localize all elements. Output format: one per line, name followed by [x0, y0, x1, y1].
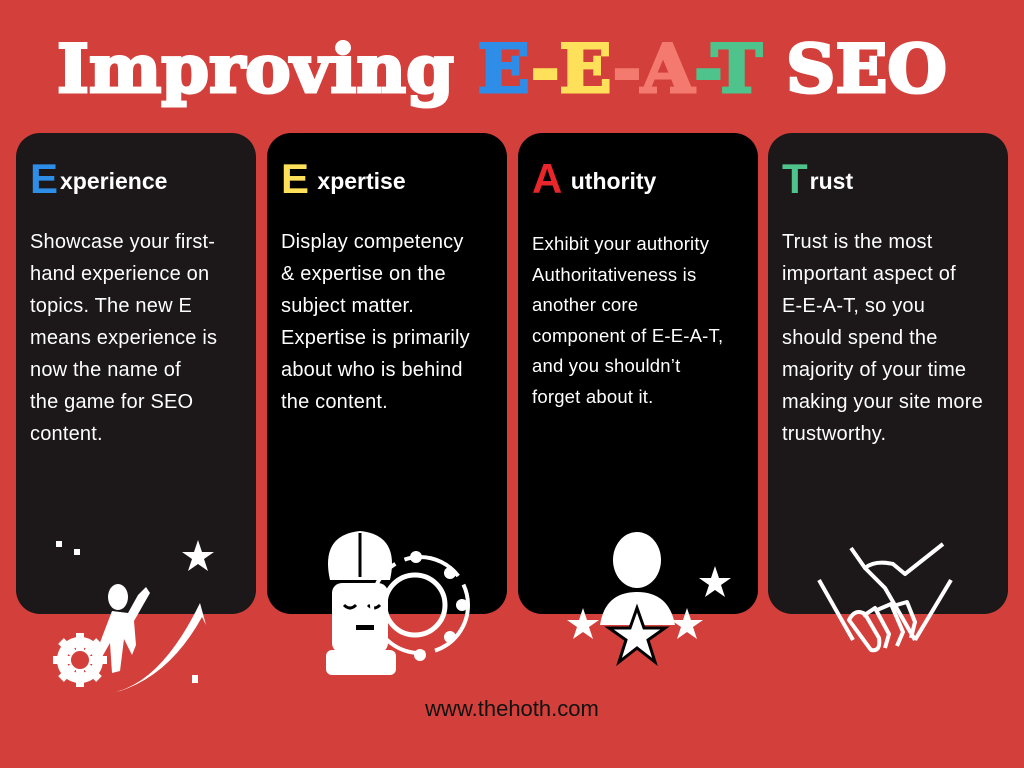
text: authority: and you shouldn’t [532, 355, 680, 376]
text: experience: now the name of [30, 359, 181, 381]
text: authority: Authoritativeness is [532, 264, 696, 284]
text: trust: trustworthy. [782, 423, 886, 445]
title: Improving E-E-A-T SEO [57, 30, 947, 108]
heading: trust: Trust [782, 155, 853, 202]
text: authority: forget about it. [532, 386, 653, 406]
panel: expertise [267, 133, 507, 614]
icon: climber [53, 540, 214, 692]
panel: authority [518, 133, 758, 614]
text: experience: Showcase your first- [30, 231, 215, 253]
heading: experience: Experience [30, 155, 167, 202]
heading: expertise: E xpertise [281, 155, 406, 202]
text: trust: Trust is the most [782, 231, 932, 253]
text: experience: the game for SEO [30, 391, 193, 413]
text: expertise: Display competency [281, 231, 464, 253]
text: trust: majority of your time [782, 359, 966, 381]
panel: experience [16, 133, 256, 614]
text: expertise: the content. [281, 391, 388, 413]
text: experience: hand experience on [30, 263, 209, 285]
icon: brain head [326, 531, 470, 675]
text: trust: E-E-A-T, so you [782, 295, 925, 317]
text: expertise [281, 231, 470, 413]
text: expertise: Expertise is primarily [281, 327, 470, 349]
text: trust: should spend the [782, 327, 938, 349]
text: experience: means experience is [30, 327, 217, 349]
text: trust: making your site more [782, 391, 983, 413]
text: experience [30, 231, 217, 445]
icon: handshake [817, 542, 953, 652]
text: expertise: & expertise on the [281, 263, 446, 285]
text: authority: another core [532, 294, 638, 315]
text: authority [532, 233, 723, 407]
text: trust [782, 231, 983, 445]
text: authority: Exhibit your authority [532, 233, 709, 254]
panel: trust [768, 133, 1008, 614]
icon: person with stars [567, 532, 731, 666]
text: experience: topics. The new E [30, 295, 192, 317]
text: expertise: subject matter. [281, 295, 414, 317]
footer url: www.thehoth.com [425, 696, 599, 721]
text: trust: important aspect of [782, 263, 956, 285]
text: authority: component of E-E-A-T, [532, 324, 723, 346]
text: experience: content. [30, 423, 103, 445]
text: expertise: about who is behind [281, 359, 463, 381]
heading: authority: A uthority [532, 155, 656, 202]
